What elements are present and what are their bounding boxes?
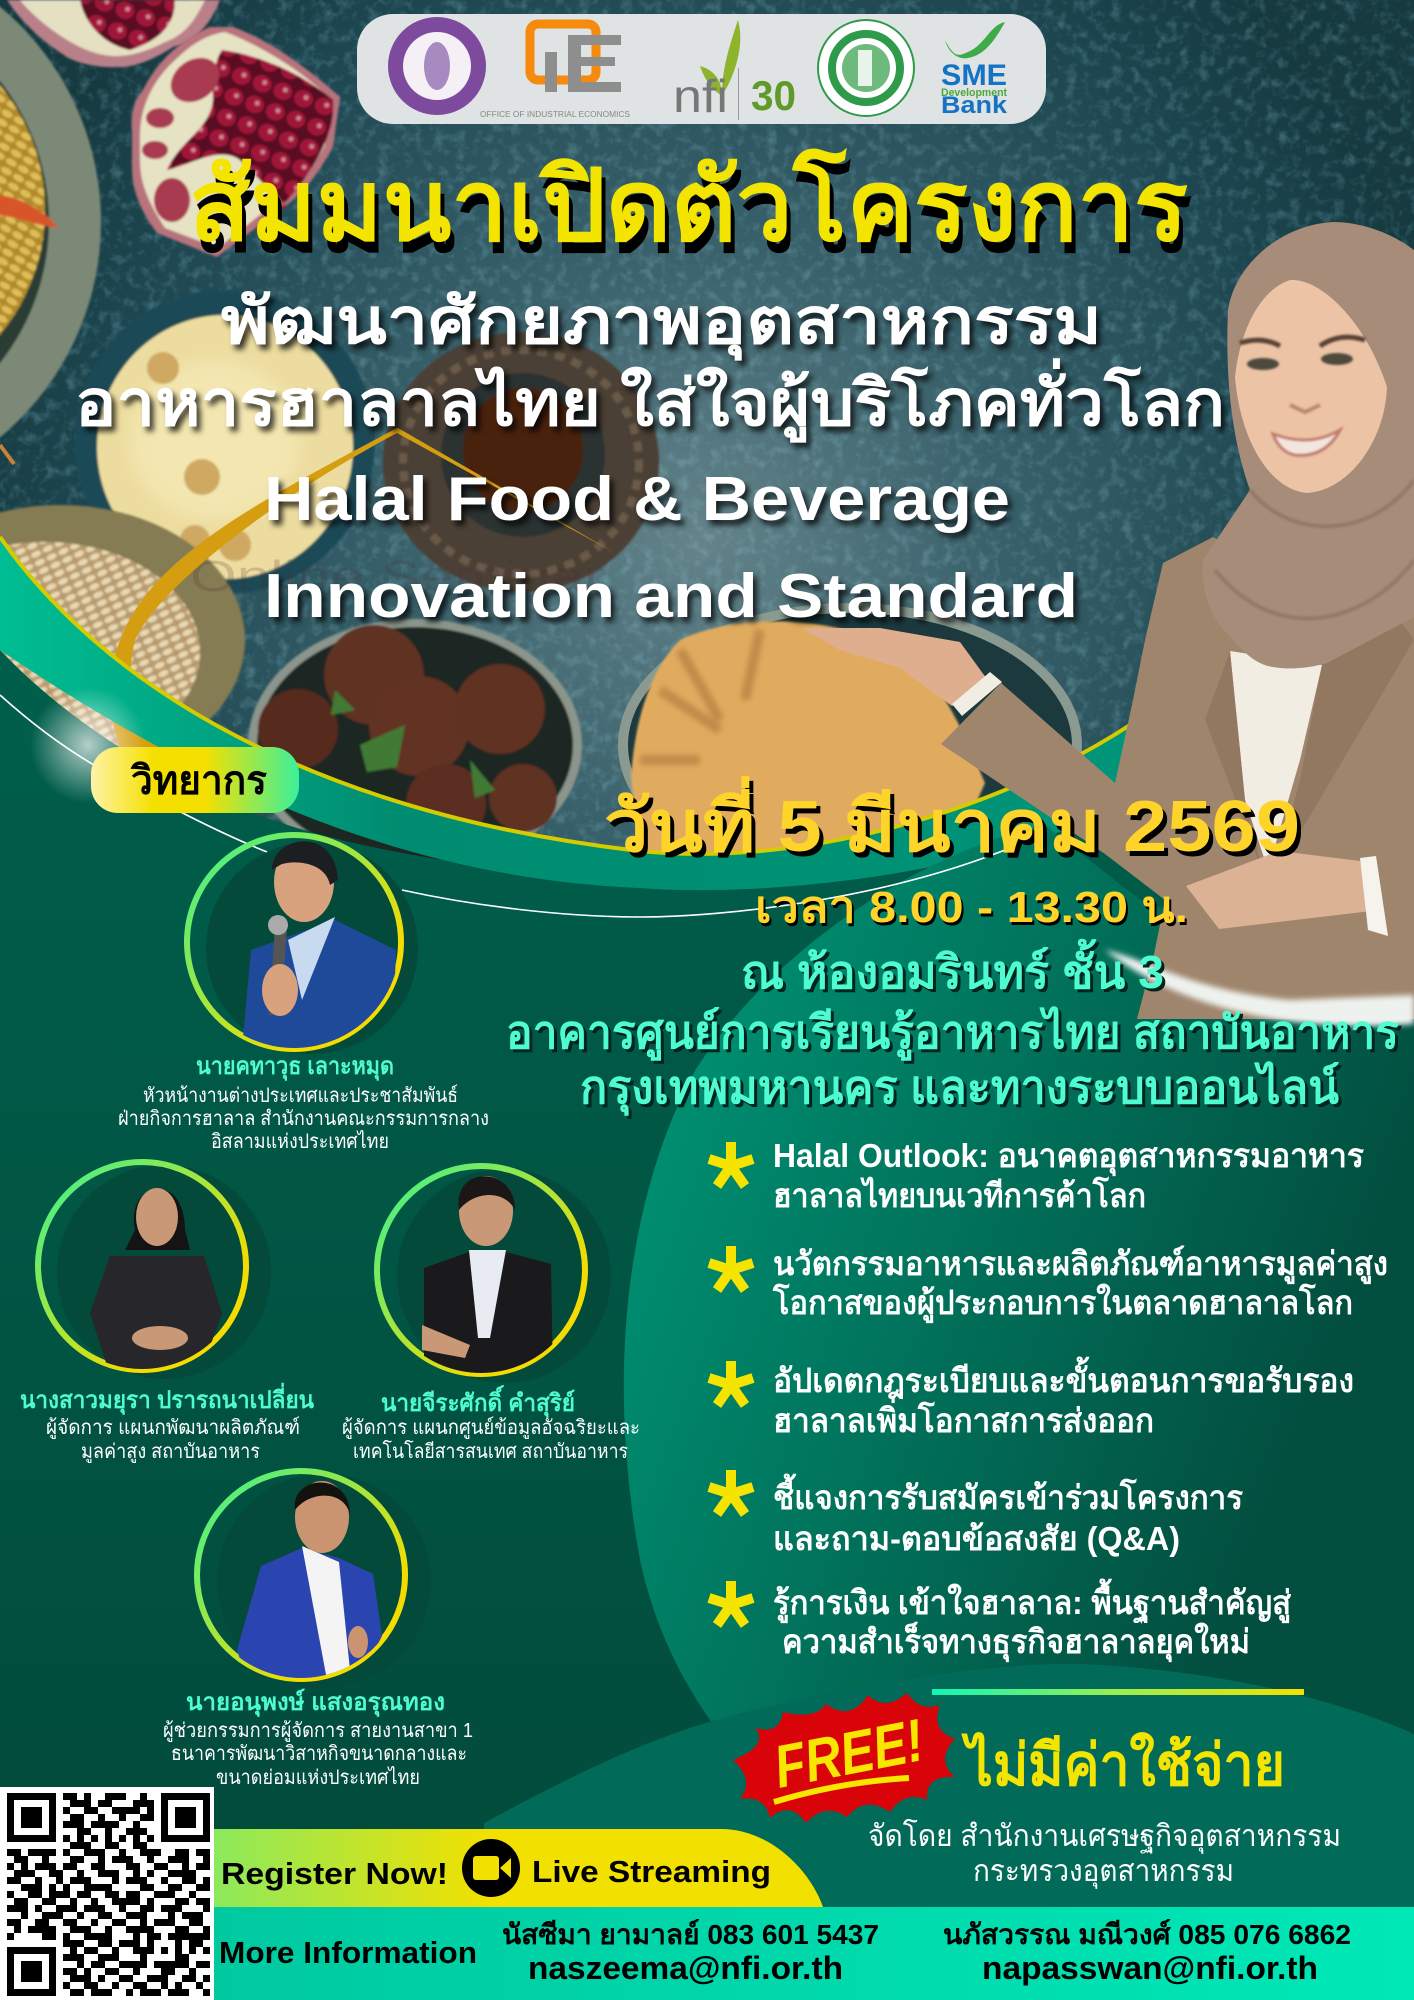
QR code <box>0 1787 214 2000</box>
speaker 3: ผู้จัดการ แผนกศูนย์ข้อมูลอัจฉริยะและ <box>342 1416 640 1440</box>
organizer: กระทรวงอุตสาหกรรม <box>973 1855 1234 1890</box>
portrait: woman in pinstripe blazer <box>90 1188 222 1375</box>
logo: Office of Industrial Economics <box>480 24 630 119</box>
speaker 4 <box>163 1471 473 1789</box>
portrait: man with microphone <box>241 841 396 1060</box>
pomegranate top <box>7 0 220 67</box>
topic 1 <box>709 1137 1364 1214</box>
speaker 3: เทคโนโลยีสารสนเทศ สถาบันอาหาร <box>353 1440 628 1463</box>
topic 5: ความสำเร็จทางธุรกิจฮาลาลยุคใหม่ <box>782 1621 1250 1663</box>
speaker 1 <box>118 835 489 1153</box>
event date: วันที่ 5 มีนาคม 2569 <box>604 775 1300 867</box>
speaker 3 <box>342 1166 640 1463</box>
speaker label pill <box>91 747 299 813</box>
right column panel <box>624 825 1414 1840</box>
subtitle Thai: อาหารฮาลาลไทย ใส่ใจผู้บริโภคทั่วโลก <box>75 358 1225 443</box>
speaker 1: นายคทาวุธ เลาะหมุด <box>196 1053 394 1082</box>
suit <box>941 537 1414 1019</box>
food photo collage <box>0 0 1082 887</box>
main title: สัมมนาเปิดตัวโครงการ <box>189 147 1188 262</box>
falafel tray <box>248 619 582 871</box>
logo: NFI 30th anniversary: 30 <box>751 72 796 119</box>
portrait: man in black suit <box>422 1176 553 1380</box>
bottom right arc <box>484 1664 1414 1910</box>
venue <box>506 938 1399 1116</box>
lower cuff <box>1360 856 1388 936</box>
speaker 4: นายอนุพงษ์ แสงอรุณทอง <box>186 1688 445 1718</box>
yellow edge line <box>0 537 1130 854</box>
watermark text in photo: Online Seminar <box>190 552 604 601</box>
topic 4: และถาม-ตอบข้อสงสัย (Q&A) <box>773 1520 1180 1557</box>
register band: Live Streaming <box>532 1854 771 1889</box>
hijab fold shadows <box>1215 480 1414 619</box>
face <box>1235 280 1387 493</box>
subtitle Thai: พัฒนาศักยภาพอุตสาหกรรม <box>221 285 1102 361</box>
tea glass <box>383 332 659 592</box>
subtitle English <box>264 465 1078 631</box>
big rice bowl top left <box>0 0 101 502</box>
subtitle English: Innovation and Standard <box>264 562 1078 631</box>
blouse <box>1230 651 1322 870</box>
facial features <box>1240 337 1365 455</box>
raised hand <box>802 628 992 706</box>
contact band: นัสซีมา ยามาลย์ 083 601 5437 <box>502 1919 879 1950</box>
venue: กรุงเทพมหานคร และทางระบบออนไลน์ <box>580 1061 1340 1116</box>
speaker 2: นางสาวมยุรา ปรารถนาเปลี่ยน <box>20 1382 315 1416</box>
dark green base <box>0 650 1414 2000</box>
hummus bowl <box>75 290 375 594</box>
speaker label pill: วิทยากร <box>130 759 267 803</box>
logo: NFI 30th anniversary <box>673 20 796 122</box>
contact band: นภัสวรรณ มณีวงศ์ 085 076 6862 <box>943 1919 1351 1950</box>
lapels <box>1205 620 1414 875</box>
teal band <box>0 537 1140 890</box>
white thin curve <box>0 695 1040 917</box>
icon: video camera <box>462 1839 520 1897</box>
topic 1: Halal Outlook: อนาคตอุตสาหกรรมอาหาร <box>773 1137 1364 1177</box>
subtitle Thai <box>75 285 1225 443</box>
topic 5: รู้การเงิน เข้าใจฮาลาล: พื้นฐานสำคัญสู่ <box>773 1578 1292 1624</box>
topic list <box>709 1137 1388 1663</box>
topic 2: โอกาสของผู้ประกอบการในตลาดฮาลาลโลก <box>772 1283 1353 1324</box>
speaker 2: ผู้จัดการ แผนกพัฒนาผลิตภัณฑ์ <box>46 1416 300 1440</box>
organizer <box>868 1818 1341 1890</box>
topic 3: ฮาลาลเพิ่มโอกาสการส่งออก <box>773 1397 1154 1439</box>
sleeve cuff <box>952 672 1002 716</box>
logo: SME Development Bank <box>941 22 1008 119</box>
logo: SME Development Bank: Bank <box>941 92 1008 119</box>
venue: อาคารศูนย์การเรียนรู้อาหารไทย สถาบันอาหาร <box>506 1006 1399 1061</box>
contact band <box>214 1907 1414 2000</box>
logo: Islamic council seal <box>818 20 914 116</box>
logo bar <box>357 14 1046 124</box>
topic 5 <box>709 1578 1292 1663</box>
topic 4: ชี้แจงการรับสมัครเข้าร่วมโครงการ <box>773 1473 1243 1516</box>
free badge <box>733 1693 955 1823</box>
speaker 1: อิสลามแห่งประเทศไทย <box>211 1130 389 1153</box>
speaker 1: หัวหน้างานต่างประเทศและประชาสัมพันธ์ <box>143 1084 458 1107</box>
register band: Register Now! <box>221 1856 448 1891</box>
skewer stick <box>0 445 14 464</box>
topic 4 <box>709 1470 1243 1557</box>
logo: SME Development Bank: Development <box>941 87 1007 99</box>
free badge: FREE! <box>769 1706 929 1801</box>
white streak <box>1105 950 1414 1026</box>
logo: NFI 30th anniversary: nfi <box>673 70 728 122</box>
speaker 1: ฝ่ายกิจการฮาลาล สำนักงานคณะกรรมการกลาง <box>118 1108 489 1130</box>
green wave background <box>0 537 1414 2000</box>
contact band: napasswan@nfi.or.th <box>982 1950 1318 1986</box>
contact band: More Information <box>219 1935 477 1970</box>
lower hand <box>1186 851 1371 929</box>
topic 2 <box>709 1245 1388 1324</box>
subtitle English: Halal Food & Beverage <box>264 465 1010 534</box>
logo: SME Development Bank: SME <box>941 59 1007 92</box>
speaker 3: นายจีระศักดิ์ คำสุริย์ <box>381 1385 575 1419</box>
speaker 4: ขนาดย่อมแห่งประเทศไทย <box>216 1766 420 1789</box>
speaker 4: ธนาคารพัฒนาวิสาหกิจขนาดกลางและ <box>171 1743 467 1765</box>
contact band: naszeema@nfi.or.th <box>528 1950 843 1986</box>
woman presenter in hijab <box>802 222 1414 1026</box>
organizer: จัดโดย สำนักงานเศรษฐกิจอุตสาหกรรม <box>868 1818 1341 1855</box>
speaker 4: ผู้ช่วยกรรมการผู้จัดการ สายงานสาขา 1 <box>163 1720 473 1743</box>
no cost text: ไม่มีค่าใช้จ่าย <box>960 1731 1285 1798</box>
logo: Ministry of Industry <box>388 17 486 115</box>
topic 2: นวัตกรรมอาหารและผลิตภัณฑ์อาหารมูลค่าสูง <box>773 1245 1388 1285</box>
register band <box>214 1829 823 1907</box>
bread tray <box>618 603 1082 887</box>
speaker 2: มูลค่าสูง สถาบันอาหาร <box>81 1441 260 1464</box>
pomegranate half <box>132 27 340 257</box>
gold curved ribbon <box>110 428 615 752</box>
event time: เวลา 8.00 - 13.30 น. <box>755 883 1188 932</box>
topic 1: ฮาลาลไทยบนเวทีการค้าโลก <box>773 1176 1146 1214</box>
accent rule <box>932 1689 1304 1695</box>
venue: ณ ห้องอมรินทร์ ชั้น 3 <box>741 938 1164 998</box>
topic 3 <box>709 1356 1354 1439</box>
speaker 2 <box>20 1162 315 1464</box>
hijab <box>1203 222 1414 668</box>
rice bowl left <box>0 505 245 775</box>
logo: Office of Industrial Economics: OFFICE OF INDUSTRIAL ECONOMICS <box>480 110 630 119</box>
topic 3: อัปเดตกฎระเบียบและขั้นตอนการขอรับรอง <box>773 1356 1354 1399</box>
portrait: man in blue suit <box>237 1481 382 1690</box>
lens glow <box>30 687 146 803</box>
